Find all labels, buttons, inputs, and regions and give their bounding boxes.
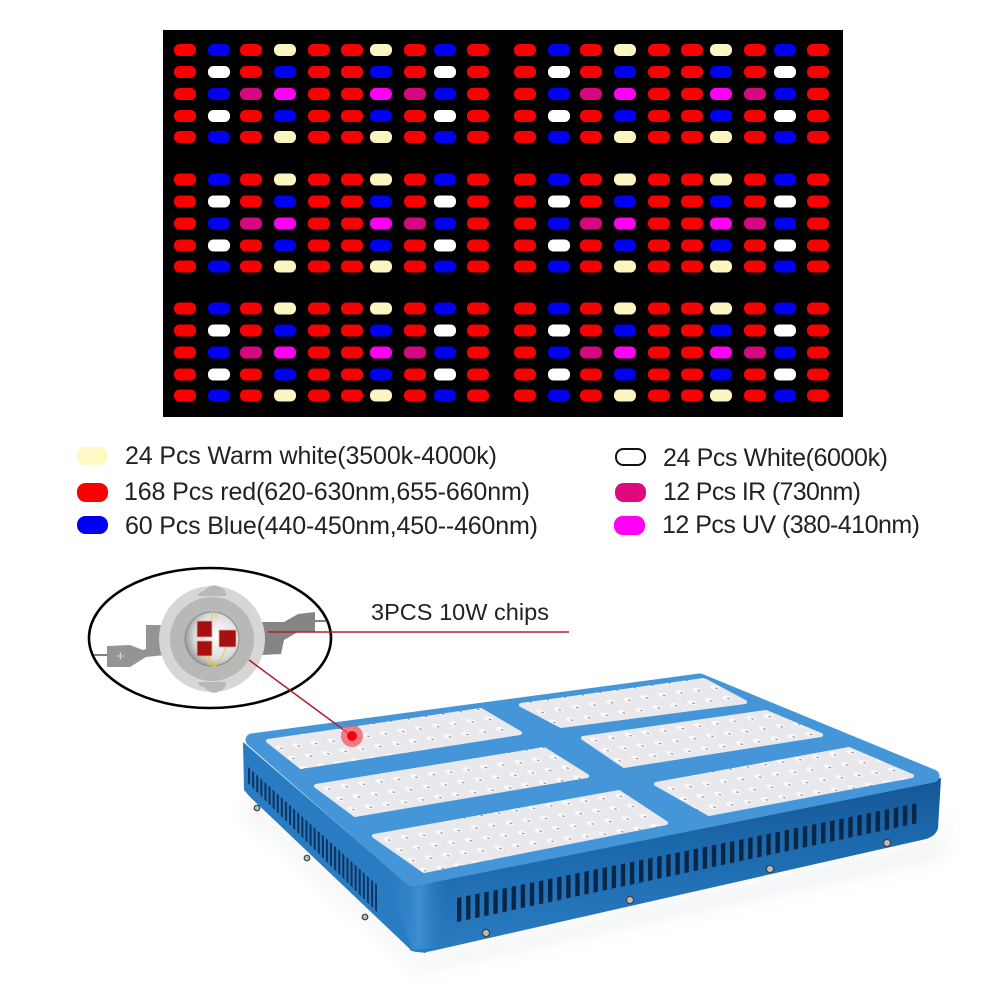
label: blue: 60 Pcs Blue(440-450nm,450--460nm) xyxy=(125,512,538,540)
chip: bond wires xyxy=(204,611,226,667)
lamp: LED panel 6 xyxy=(656,749,912,814)
lamp shadow xyxy=(240,800,955,972)
lamp: front corner highlight xyxy=(385,868,455,950)
leader line to lamp xyxy=(249,660,352,736)
label: warm white: 24 Pcs Warm white(3500k-4000k) xyxy=(125,442,497,470)
lamp: LED panel 2 xyxy=(316,749,587,815)
chip: red dies xyxy=(197,621,236,656)
chip: inner ring xyxy=(170,597,254,681)
lamp: LED panel 3 xyxy=(374,792,666,871)
chip: negative and positive leads: + xyxy=(116,648,125,665)
LED grow lamp xyxy=(243,680,941,953)
chip: top and bottom lugs xyxy=(198,585,226,693)
label: IR: 12 Pcs IR (730nm) xyxy=(663,478,861,506)
lamp: LED panel 5 xyxy=(583,712,821,766)
swatch: blue xyxy=(77,516,108,534)
LED block: bottom right xyxy=(514,302,829,402)
swatch: warm white xyxy=(77,447,108,465)
lamp: LED panel 4 xyxy=(521,680,745,726)
label: UV: 12 Pcs UV (380-410nm) xyxy=(662,511,920,539)
callout text: 3PCS 10W chips: 3PCS 10W chips xyxy=(371,599,549,625)
lamp: front side wall xyxy=(405,778,941,952)
label: red: 168 Pcs red(620-630nm,655-660nm) xyxy=(124,478,530,506)
panel: LED chip layout board xyxy=(163,30,843,417)
marker: red chip location xyxy=(341,725,363,747)
LED block: top right xyxy=(514,44,829,143)
LED block: middle right xyxy=(514,174,829,272)
swatch: IR xyxy=(615,483,646,502)
swatch: red xyxy=(77,483,108,502)
lamp: top face xyxy=(252,680,933,880)
LED block: top left xyxy=(174,44,489,143)
swatch: UV xyxy=(614,516,645,535)
legend: chip colour counts xyxy=(77,442,920,540)
lamp: front vents xyxy=(457,803,918,922)
LED block: bottom left xyxy=(174,302,489,402)
lamp: left side wall xyxy=(243,742,426,953)
swatch: white xyxy=(616,449,645,465)
lamp: screws xyxy=(254,805,891,937)
leader line to text xyxy=(268,631,569,633)
chip: dome xyxy=(185,612,239,666)
chip: outer housing xyxy=(159,586,265,692)
LED block: middle left xyxy=(174,174,489,272)
callout: magnified chip ellipse xyxy=(89,568,331,708)
label: white: 24 Pcs White(6000k) xyxy=(663,444,888,472)
chip: negative and positive leads xyxy=(94,612,327,667)
lamp: LED panel 1 xyxy=(268,710,520,767)
lamp: side vents xyxy=(248,767,377,912)
